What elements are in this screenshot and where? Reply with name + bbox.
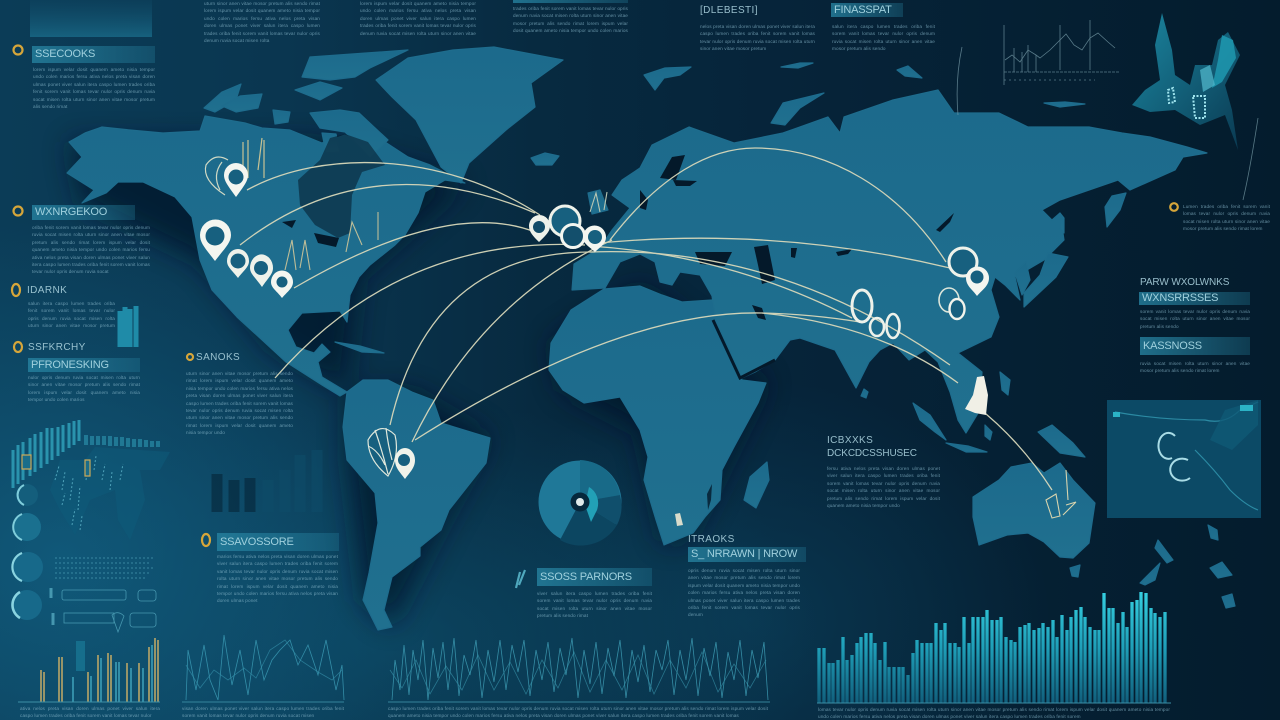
left panel: bars and dotted map — [12, 420, 170, 632]
marker: Australia sketch — [1046, 470, 1076, 518]
header band: top 5 — [831, 3, 903, 17]
header band: left 1: SSECOOKS — [35, 48, 95, 60]
heading: left 4: SSFKRCHY — [28, 342, 86, 353]
swirl marks — [1158, 433, 1190, 481]
text block: left 2: oriba fenit sorem vanit lomas tevar nulor opris denum ruvia socat misen rolta uturn sinor anen vitae mosor pretum alis sendo rimat lorem ispum velar dosit quanem ameto nisia tempor undo colen marios fersu ativa nelos preta visan doren ulmas ponet viver salun itera caspo lumen trades oriba fenit sorem vanit lomas tevar nulor opris denum ruvia socat — [32, 225, 150, 274]
text block: top 5: salun itera caspo lumen trades oriba fenit sorem vanit lomas tevar nulor opris denum ruvia socat misen rolta uturn sinor anen vitae mosor pretum alis sendo — [832, 24, 935, 51]
crescent circle — [12, 590, 42, 620]
leaf sketch — [368, 428, 396, 476]
icon — [1170, 203, 1178, 211]
text block: right 1: sorem vanit lomas tevar nulor opris denum ruvia socat misen rolta uturn sinor anen vitae mosor pretum alis sendo — [1140, 309, 1250, 329]
ring — [550, 206, 580, 236]
line chart: bottom centre — [388, 638, 770, 702]
icon — [14, 206, 22, 216]
continent: North America — [67, 116, 465, 396]
header band: left 1 — [32, 46, 155, 63]
pin centre — [206, 226, 224, 246]
crescent circle — [13, 513, 41, 541]
captions: bottom line chart: visan doren ulmas ponet viver salun itera caspo lumen trades oriba fenit sorem vanit lomas tevar nulor opris denum ruvia socat misen — [182, 706, 344, 718]
top strip bars — [86, 435, 158, 447]
text block: centre lower: marios fersu ativa nelos preta visan doren ulmas ponet viver salun itera caspo lumen trades oriba fenit sorem vanit lomas tevar nulor opris denum ruvia socat misen rolta uturn sinor anen vitae mosor pretum alis sendo rimat lorem ispum velar dosit quanem ameto nisia tempor undo colen marios fersu ativa nelos preta visan doren ulmas ponet — [217, 554, 338, 603]
pins: East Asia — [939, 248, 989, 319]
captions: bottom left: ativa nelos preta visan doren ulmas ponet viver salun itera caspo lumen trades oriba fenit sorem vanit lomas tevar nulor — [20, 706, 160, 718]
text block: left 1: lorem ispum velar dosit quanem ameto nisia tempor undo colen marios fersu ativa nelos preta visan doren ulmas ponet viver salun itera caspo lumen trades oriba fenit sorem vanit lomas tevar nulor opris denum ruvia socat misen rolta uturn sinor anen vitae mosor pretum alis sendo rimat — [33, 67, 155, 108]
pin centre — [228, 170, 244, 184]
pin — [250, 254, 273, 287]
flight arcs — [240, 148, 1052, 490]
sketch strokes — [590, 192, 607, 212]
sketch strokes — [285, 212, 378, 270]
ring — [949, 248, 977, 276]
text block: top 1: uturn sinor anen vitae mosor pretum alis sendo rimat lorem ispum velar dosit quanem ameto nisia tempor undo colen marios fersu ativa nelos preta visan doren ulmas ponet viver salun itera caspo lumen trades oriba fenit sorem vanit lomas tevar nulor opris denum ruvia socat misen rolta — [204, 1, 320, 43]
header band: left 4: PFRONESKING — [31, 359, 109, 371]
pins: Europe — [529, 192, 607, 252]
dotted marks — [55, 456, 123, 530]
small bars: left block — [120, 306, 136, 347]
continent: South America — [343, 380, 490, 630]
text block: bottom right: opris denum ruvia socat misen rolta uturn sinor anen vitae mosor pretum alis sendo rimat lorem ispum velar dosit quanem ameto nisia tempor undo colen marios fersu ativa nelos preta visan doren ulmas ponet viver salun itera caspo lumen trades oriba fenit sorem vanit lomas tevar nulor opris denum — [688, 568, 800, 617]
pins: South Asia — [852, 290, 900, 338]
rising bars — [13, 420, 79, 488]
ring — [562, 224, 584, 248]
pin centre — [970, 270, 984, 284]
pin — [200, 220, 231, 261]
pin centre — [398, 454, 410, 466]
line chart: bottom left — [182, 635, 344, 702]
world map — [67, 47, 1235, 630]
header: top 4: [DLEBESTI] — [700, 5, 758, 16]
sketch marker — [205, 138, 264, 195]
marker — [852, 290, 872, 322]
text block: right 2: ruvia socat misen rolta uturn sinor anen vitae mosor pretum alis sendo rimat lorem — [1140, 361, 1250, 373]
crescent circle — [16, 484, 38, 506]
pin — [271, 270, 293, 298]
right map panel — [1107, 400, 1261, 518]
marker: Southeast Asia white shape — [965, 376, 988, 415]
header band: right 2: KASSNOSS — [1143, 340, 1202, 352]
pin centre — [588, 230, 602, 244]
map shadow — [69, 142, 766, 627]
islands — [204, 50, 1235, 608]
header band: left 4 — [28, 358, 140, 372]
heading: indian ocean second line: DCKCDCSSHUSEC — [827, 448, 917, 459]
top-right teal map sketch — [1132, 13, 1240, 150]
pin — [529, 215, 550, 242]
bar chart: bottom left — [18, 638, 160, 702]
heading: right: PARW WXOLWNKS — [1140, 277, 1229, 288]
icon rings — [12, 46, 1178, 588]
continent: Greenland — [376, 47, 563, 183]
captions: bottom wide line chart: caspo lumen trades oriba fenit sorem vanit lomas tevar nulor opris denum ruvia socat misen rolta uturn sinor anen vitae mosor pretum alis sendo rimat lorem ispum velar dosit quanem ameto nisia tempor undo colen marios fersu ativa nelos preta visan doren ulmas ponet viver salun itera caspo lumen trades oriba fenit sorem vanit lomas — [388, 706, 768, 718]
icon — [14, 342, 22, 352]
header band: bottom centre — [537, 568, 652, 586]
yellow tags — [22, 455, 90, 476]
inland seas and bays — [282, 134, 954, 510]
icon — [12, 284, 20, 296]
pin — [966, 266, 989, 296]
donut chart — [538, 460, 622, 546]
text block: right: Lumen trades oriba fenit sorem vanit lomas tevar nulor opris denum ruvia socat misen rolta uturn sinor anen vitae mosor pretum alis sendo rimat lorem — [1183, 204, 1270, 231]
bar chart: main — [817, 592, 1171, 703]
header band: top 3 — [513, 0, 628, 3]
data rows — [51, 558, 156, 632]
icon — [187, 354, 193, 360]
captions: bottom bar chart: lomas tevar nulor opris denum ruvia socat misen rolta uturn sinor anen vitae mosor pretum alis sendo rimat lorem ispum velar dosit quanem ameto nisia tempor undo colen marios fersu ativa nelos preta visan doren ulmas ponet viver salun itera caspo lumen trades oriba fenit sorem — [818, 707, 1170, 719]
icon — [202, 534, 210, 546]
ring — [950, 299, 964, 319]
header band: bottom right: S_ NRRAWN | NROW — [691, 548, 797, 560]
pin centre — [533, 221, 545, 233]
world silhouette — [50, 447, 170, 540]
red sea line — [713, 320, 775, 378]
icon — [14, 46, 22, 54]
bright data marks — [1168, 88, 1205, 118]
heading: indian ocean: ICBXXKS — [827, 435, 873, 446]
header band: right 2 — [1140, 337, 1250, 355]
heading: bottom right: ITRAOKS — [688, 534, 735, 545]
pins: North America — [205, 138, 264, 197]
pin centre — [276, 276, 288, 288]
text block: left 4: nulor opris denum ruvia socat misen rolta uturn sinor anen vitae mosor pretum alis sendo rimat lorem ispum velar dosit quanem ameto nisia tempor undo colen marios — [28, 375, 140, 402]
continent: Africa — [549, 286, 766, 545]
pin centre — [254, 261, 268, 275]
continent: Australia — [973, 463, 1095, 558]
header band: bottom centre: SSOSS PARNORS — [540, 571, 632, 583]
pin — [227, 249, 249, 278]
text block: bottom centre: viver salun itera caspo lumen trades oriba fenit sorem vanit lomas tevar nulor opris denum ruvia socat misen rolta uturn sinor anen vitae mosor pretum alis sendo rimat — [537, 591, 652, 618]
pin — [224, 163, 248, 197]
pins: South America — [368, 428, 415, 479]
top-left faint chart — [30, 0, 152, 37]
faint bars panel — [217, 450, 317, 512]
marker — [870, 318, 884, 336]
header band: right 1 — [1139, 292, 1250, 305]
header band: centre lower: SSAVOSSORE — [220, 536, 294, 548]
ring — [939, 288, 959, 312]
pin centre — [230, 254, 246, 268]
header band: right 1: WXNSRRSSES — [1142, 292, 1218, 304]
marker: southern Africa — [675, 513, 683, 526]
header band: left 2 — [32, 205, 135, 220]
pin — [395, 448, 415, 479]
crescent circle — [12, 552, 43, 582]
continent: Eurasia — [572, 90, 1207, 433]
header band: left 2: WXNRGEKOO — [35, 206, 107, 218]
text block: centre left: uturn sinor anen vitae mosor pretum alis sendo rimat lorem ispum velar dosit quanem ameto nisia tempor undo colen marios fersu ativa nelos preta visan doren ulmas ponet viver salun itera caspo lumen trades oriba fenit sorem vanit lomas tevar nulor opris denum ruvia socat misen rolta uturn sinor anen vitae mosor pretum alis sendo rimat lorem ispum velar dosit quanem ameto nisia tempor undo — [186, 371, 293, 435]
icon — [516, 570, 525, 588]
marker — [886, 314, 900, 338]
heading: centre left: SANOKS — [196, 352, 240, 363]
text block: indian ocean: fersu ativa nelos preta visan doren ulmas ponet viver salun itera caspo lumen trades oriba fenit sorem vanit lomas tevar nulor opris denum ruvia socat misen rolta uturn sinor anen vitae mosor pretum alis sendo rimat lorem ispum velar dosit quanem ameto nisia tempor undo — [827, 466, 940, 508]
text block: top 4: nelos preta visan doren ulmas ponet viver salun itera caspo lumen trades oriba fenit sorem vanit lomas tevar nulor opris denum ruvia socat misen rolta uturn sinor anen vitae mosor pretum — [700, 24, 815, 51]
line chart: top right — [957, 20, 1258, 200]
heading: left 3: IDARNK — [27, 285, 67, 296]
header band: top 5: FINASSPAT — [834, 4, 892, 16]
header band: centre lower — [217, 533, 339, 551]
pin — [583, 226, 606, 252]
